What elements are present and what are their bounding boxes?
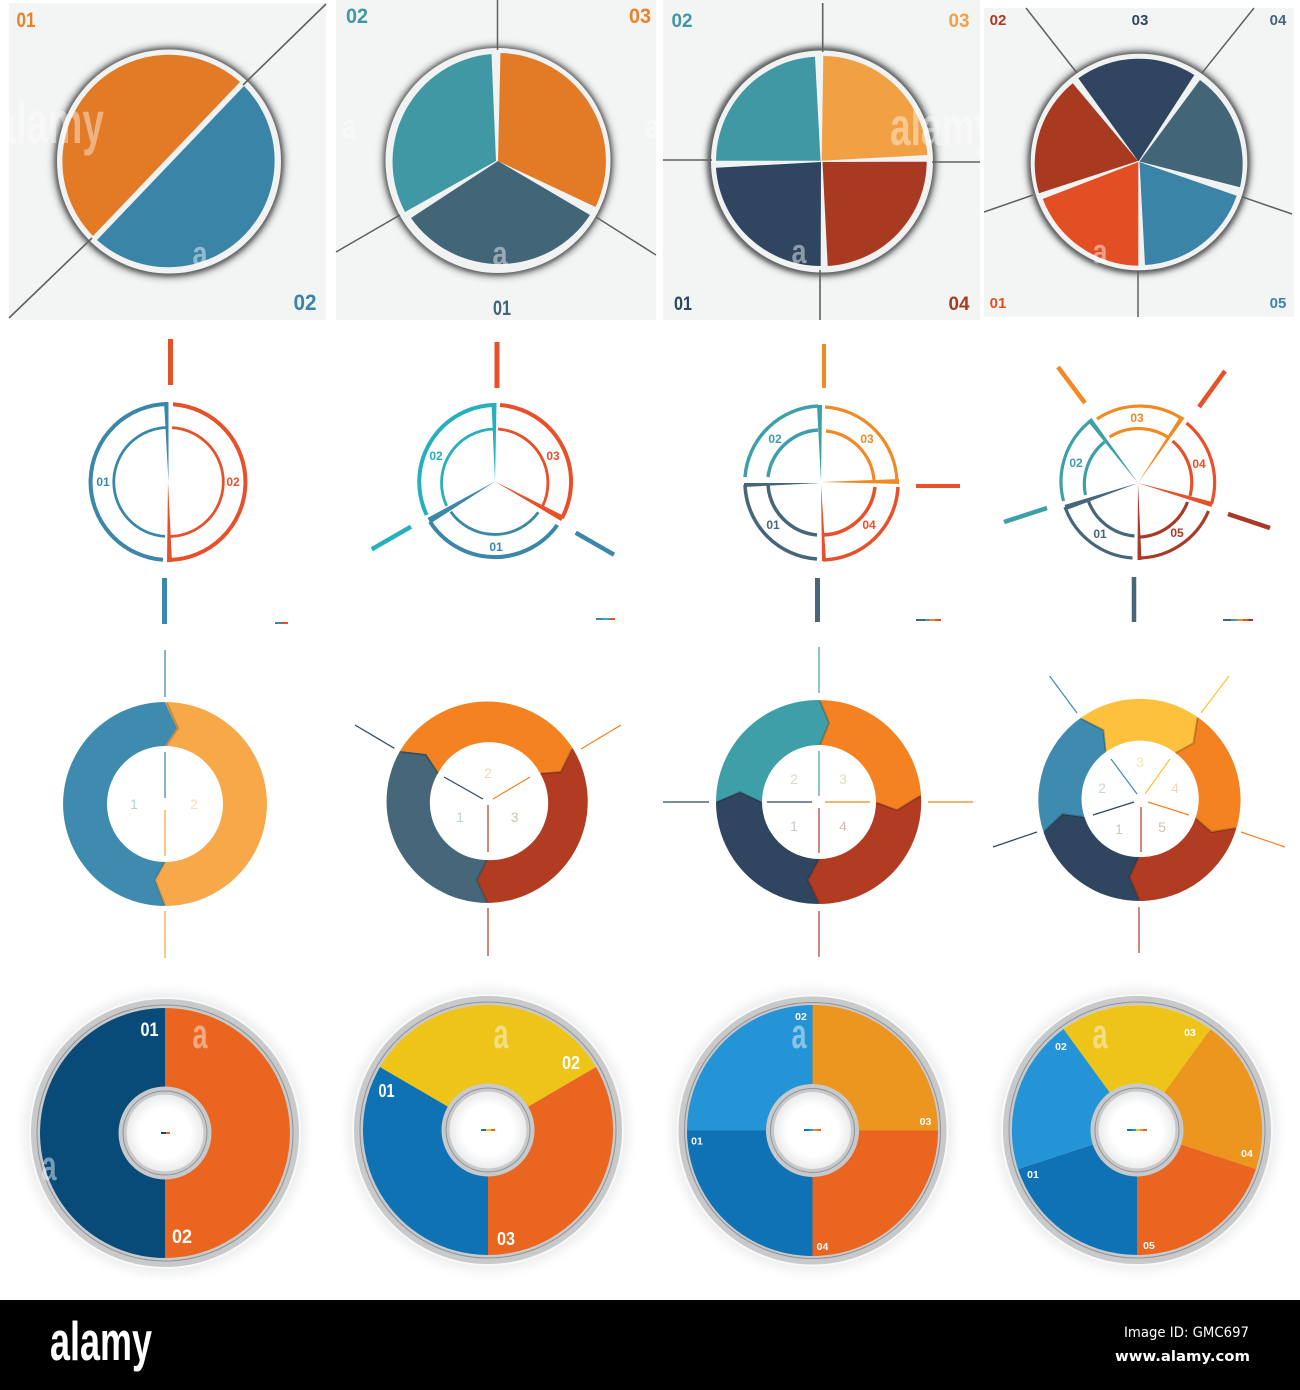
pointer 4 (1148, 802, 1285, 847)
ring arcs and wedges (1061, 406, 1215, 560)
part 01 outline (745, 485, 817, 559)
pie soft halo (378, 41, 618, 281)
panel background (663, 0, 980, 320)
label 04: 04 (948, 294, 970, 315)
segment 01 (716, 162, 821, 266)
label 02: 02 (429, 449, 443, 463)
label 01: 01 (691, 1136, 703, 1148)
segment 2 (155, 702, 267, 906)
segment 02 (380, 1005, 596, 1130)
segment 02 (97, 86, 275, 267)
segment 03 (488, 1067, 613, 1255)
wedge 01 (164, 402, 168, 482)
label 4: 4 (1171, 780, 1179, 796)
wedge 04 (821, 484, 826, 561)
pie white rim (711, 50, 933, 272)
ring thin line (1009, 1002, 1265, 1258)
segment 04 (1137, 1029, 1262, 1169)
label 05: 05 (1170, 526, 1184, 540)
segment 01 (40, 1008, 165, 1258)
wedge 03 (821, 479, 899, 484)
white edge (676, 994, 948, 1266)
label 01: 01 (140, 1020, 159, 1041)
pointer 3 (487, 805, 489, 956)
pointer 2 (493, 725, 621, 799)
website: www.alamy.com (1115, 1349, 1250, 1365)
inner line blue (164, 752, 166, 798)
part 03 outline (1097, 406, 1182, 437)
part 02 outline (1061, 421, 1104, 501)
label 02: 02 (1069, 456, 1083, 470)
white edge (352, 994, 624, 1266)
pointer 3 (825, 801, 973, 803)
inner ring (770, 1088, 855, 1173)
divider lines (663, 3, 980, 320)
small colour key (596, 618, 615, 620)
wedge 03 (1138, 416, 1184, 483)
label 02: 02 (768, 432, 782, 446)
label 5: 5 (1158, 819, 1166, 835)
segment 01 (1018, 1130, 1137, 1255)
label 2: 2 (1098, 780, 1106, 796)
divider lines (336, 0, 656, 255)
panel: four-part pie on grey (663, 0, 995, 320)
segment 05 (1140, 162, 1237, 265)
part 03 outline (825, 407, 897, 482)
pie shadow (1028, 51, 1250, 274)
outline ring chart: five parts (1004, 367, 1270, 622)
white edge (29, 997, 301, 1269)
watermark letter: a (792, 233, 807, 271)
segment 03 (498, 53, 606, 207)
label 2: 2 (190, 796, 198, 812)
label 1: 1 (790, 818, 798, 834)
label 01: 01 (16, 9, 36, 32)
watermark letter right: a (645, 108, 660, 146)
segment 02 (716, 57, 820, 161)
wedge 02 (492, 403, 496, 482)
segment 01 (363, 1067, 488, 1255)
wedge 03 (495, 482, 564, 521)
inner ring (1094, 1088, 1180, 1172)
pointer blue (576, 533, 614, 555)
watermark letter: a (192, 1010, 208, 1057)
pointer 1 (663, 801, 812, 803)
segment 3 (820, 700, 921, 810)
outline ring chart: three parts (372, 342, 615, 620)
watermark letter: a (1092, 233, 1108, 271)
inner ring (122, 1090, 208, 1176)
label 02: 02 (795, 1011, 807, 1023)
outer pointer orange (164, 911, 166, 958)
watermark letter: a (792, 1010, 807, 1057)
segment 5 (1130, 818, 1236, 901)
panel background (984, 8, 1294, 317)
segment 03 (822, 56, 927, 161)
soft halo (347, 989, 629, 1271)
pie shadow (383, 46, 613, 276)
pointer 01 (1132, 577, 1136, 622)
label 03: 03 (948, 11, 970, 32)
arrow edge shading (401, 749, 572, 902)
ring thin line (360, 1002, 616, 1258)
inner ring thin line (123, 1091, 207, 1175)
outer grey ring (358, 1000, 618, 1260)
panel background (9, 3, 326, 320)
segment 01 (687, 1130, 812, 1256)
wedge 04 (1138, 483, 1212, 507)
label 02: 02 (226, 475, 240, 489)
label 05: 05 (1143, 1240, 1155, 1252)
pie soft halo (49, 42, 289, 282)
label 1: 1 (1115, 821, 1123, 837)
pointer bottom (815, 578, 820, 622)
label 1: 1 (456, 809, 464, 825)
label 02: 02 (1055, 1041, 1067, 1053)
segment 3 (477, 748, 588, 903)
pointer 5 (1139, 807, 1141, 953)
black band (0, 1300, 1300, 1390)
outline ring chart: four parts (744, 344, 960, 622)
watermark letter left: a (342, 108, 357, 146)
label 01: 01 (378, 1081, 394, 1101)
ring thin line (37, 1005, 293, 1261)
soft halo (24, 992, 306, 1274)
label 02: 02 (172, 1227, 192, 1248)
segment 02 (687, 1005, 812, 1130)
label 04: 04 (1270, 12, 1287, 29)
ringed pie: two parts (24, 992, 306, 1274)
label 03: 03 (860, 432, 874, 446)
pointer 4 (818, 808, 820, 957)
divider line (9, 4, 326, 318)
wedge 02 (817, 405, 822, 482)
part 05 outline (1138, 502, 1208, 558)
segment 03 (1078, 59, 1194, 162)
panel: three-part pie on grey (336, 0, 660, 320)
watermark letter bottom: a (492, 235, 508, 273)
pie shadow (54, 47, 284, 277)
label 4: 4 (839, 818, 847, 834)
part 01 inner arc (451, 512, 538, 534)
segment 02 (165, 1008, 290, 1258)
label 03: 03 (920, 1116, 931, 1128)
segment 01 (62, 55, 240, 236)
small colour key (1127, 1129, 1147, 1131)
white edge (1001, 994, 1273, 1266)
segment 3 (1080, 699, 1198, 753)
pointer 3 (1145, 676, 1229, 794)
label 01: 01 (1093, 527, 1107, 541)
part 04 outline (1172, 423, 1215, 504)
inner line orange (164, 810, 166, 856)
ring thin line (684, 1002, 940, 1258)
segment 2 (400, 701, 573, 773)
pie soft halo (1023, 46, 1255, 278)
small colour key (275, 622, 288, 624)
image id: Image ID: GMC697 (1124, 1325, 1249, 1341)
alamy logo: alamy (50, 1310, 152, 1372)
small colour key (481, 1129, 495, 1131)
watermark letter: a (494, 1010, 509, 1057)
part 04 outline (823, 487, 898, 560)
watermark: alamy (890, 97, 995, 157)
pie white rim (386, 48, 610, 273)
segment 2 (1038, 718, 1106, 832)
label 1: 1 (130, 796, 138, 812)
segment 4 (808, 795, 921, 904)
ringed pie: three parts (347, 989, 629, 1271)
label 03: 03 (546, 449, 560, 463)
pointer 05 (1228, 514, 1270, 528)
part 02 inner arc (442, 429, 493, 506)
arrow donut: two parts (63, 650, 267, 958)
pointer bottom (162, 578, 167, 624)
pointer 1 (993, 802, 1134, 847)
pointer top (822, 344, 826, 388)
segment 02 (393, 54, 496, 212)
panel: two-part pie on grey (0, 3, 326, 320)
label 02: 02 (346, 5, 368, 28)
pointer right (916, 484, 960, 488)
soft halo (672, 990, 954, 1272)
watermark letter: a (192, 235, 208, 273)
part 01 outline (91, 404, 168, 560)
label 01: 01 (489, 540, 503, 554)
segment 01 (411, 161, 590, 264)
pointer 2 (818, 647, 820, 796)
outline ring chart: two parts (91, 339, 288, 624)
arrow edge shading (717, 701, 920, 903)
label 05: 05 (1270, 295, 1286, 312)
pie white rim (1031, 54, 1247, 270)
label 04: 04 (817, 1241, 828, 1253)
outer grey ring (1008, 1000, 1266, 1260)
pie shadow (707, 47, 936, 276)
small colour key (804, 1129, 821, 1131)
label 02: 02 (990, 12, 1006, 29)
label 2: 2 (484, 765, 492, 781)
label 01: 01 (990, 295, 1006, 312)
part 01 inner arc (114, 428, 168, 536)
label 3: 3 (839, 771, 847, 787)
divider lines (984, 8, 1292, 317)
label 3: 3 (511, 809, 519, 825)
watermark letter lower: a (42, 1142, 57, 1189)
pointer 04 (1199, 371, 1225, 407)
segment 01 (1043, 162, 1138, 266)
segment 03 (812, 1005, 938, 1130)
segment 02 (1035, 83, 1138, 193)
inner ring thin line (1095, 1088, 1179, 1172)
arrow donut: three parts (355, 701, 621, 956)
label 01: 01 (1027, 1169, 1039, 1181)
label 04: 04 (862, 518, 876, 532)
panel: five-part pie on grey (984, 8, 1294, 317)
label 01: 01 (766, 518, 780, 532)
segment 04 (812, 1130, 938, 1256)
ring segments (1038, 699, 1241, 901)
pointer top (168, 339, 173, 385)
part 02 outline (419, 405, 494, 515)
wedge 02 (1088, 418, 1138, 483)
segment 1 (63, 702, 177, 906)
outer pointer blue (164, 650, 166, 697)
label 01: 01 (674, 294, 692, 315)
segment 04 (822, 162, 927, 266)
watermark letter: a (1092, 1010, 1108, 1057)
label 01: 01 (493, 297, 511, 320)
label 03: 03 (629, 5, 651, 28)
inner ring thin line (770, 1088, 854, 1172)
label 01: 01 (96, 475, 110, 489)
footer bar (0, 1300, 1300, 1390)
segment 1 (387, 751, 487, 903)
part 02 inner arc (168, 428, 223, 537)
pointer 1 (355, 725, 483, 799)
arrow donut: five parts (993, 676, 1285, 953)
label 03: 03 (1184, 1027, 1196, 1039)
segment 2 (716, 700, 829, 802)
wedge 01 (744, 483, 820, 487)
label 2: 2 (790, 771, 798, 787)
label 3: 3 (1136, 754, 1144, 770)
pointer 02 (1004, 508, 1047, 522)
wedge 01 (428, 482, 495, 524)
pointer 2 (1050, 676, 1137, 794)
wedge 02 (167, 482, 172, 562)
outer grey ring (683, 1001, 942, 1260)
segment 03 (1064, 1005, 1210, 1130)
small colour key (161, 1132, 170, 1134)
pie soft halo (703, 42, 941, 280)
ringed pie: five parts (996, 989, 1278, 1271)
label 03: 03 (497, 1229, 515, 1249)
label 02: 02 (562, 1053, 580, 1073)
pointer 03 (1058, 367, 1085, 403)
wedge 01 (1064, 483, 1138, 510)
part 01 outline (1065, 500, 1134, 558)
segment 02 (1012, 1029, 1137, 1169)
segment 04 (1140, 80, 1243, 187)
wedge 05 (1138, 483, 1142, 560)
ringed pie: four parts (672, 990, 954, 1272)
segment 4 (1176, 717, 1241, 832)
arrow donut: four parts (663, 647, 973, 957)
label 04: 04 (1192, 457, 1206, 471)
label 04: 04 (1241, 1148, 1253, 1160)
arrow edge shading (155, 703, 178, 905)
pointer red (494, 342, 500, 388)
panel background (336, 0, 656, 320)
small colour key (1223, 619, 1253, 621)
part 03 inner arc (498, 429, 548, 506)
label 03: 03 (1130, 411, 1144, 425)
small colour key (916, 619, 941, 621)
part 02 outline (168, 404, 245, 560)
label 03: 03 (1132, 12, 1148, 29)
part 01 outline (430, 522, 557, 557)
segment 1 (716, 792, 819, 904)
inner ring (446, 1088, 530, 1172)
soft halo (996, 989, 1278, 1271)
label 02: 02 (294, 290, 316, 315)
inner ring thin line (446, 1088, 530, 1172)
pointer cyan (372, 527, 411, 549)
segment 05 (1137, 1130, 1256, 1255)
part 03 outline (500, 405, 571, 518)
segment 1 (1044, 814, 1140, 901)
pie white rim (57, 50, 281, 274)
label 02: 02 (672, 11, 692, 32)
outer grey ring (36, 1004, 294, 1262)
arrow edge shading (1044, 718, 1236, 900)
part 02 outline (745, 406, 818, 477)
